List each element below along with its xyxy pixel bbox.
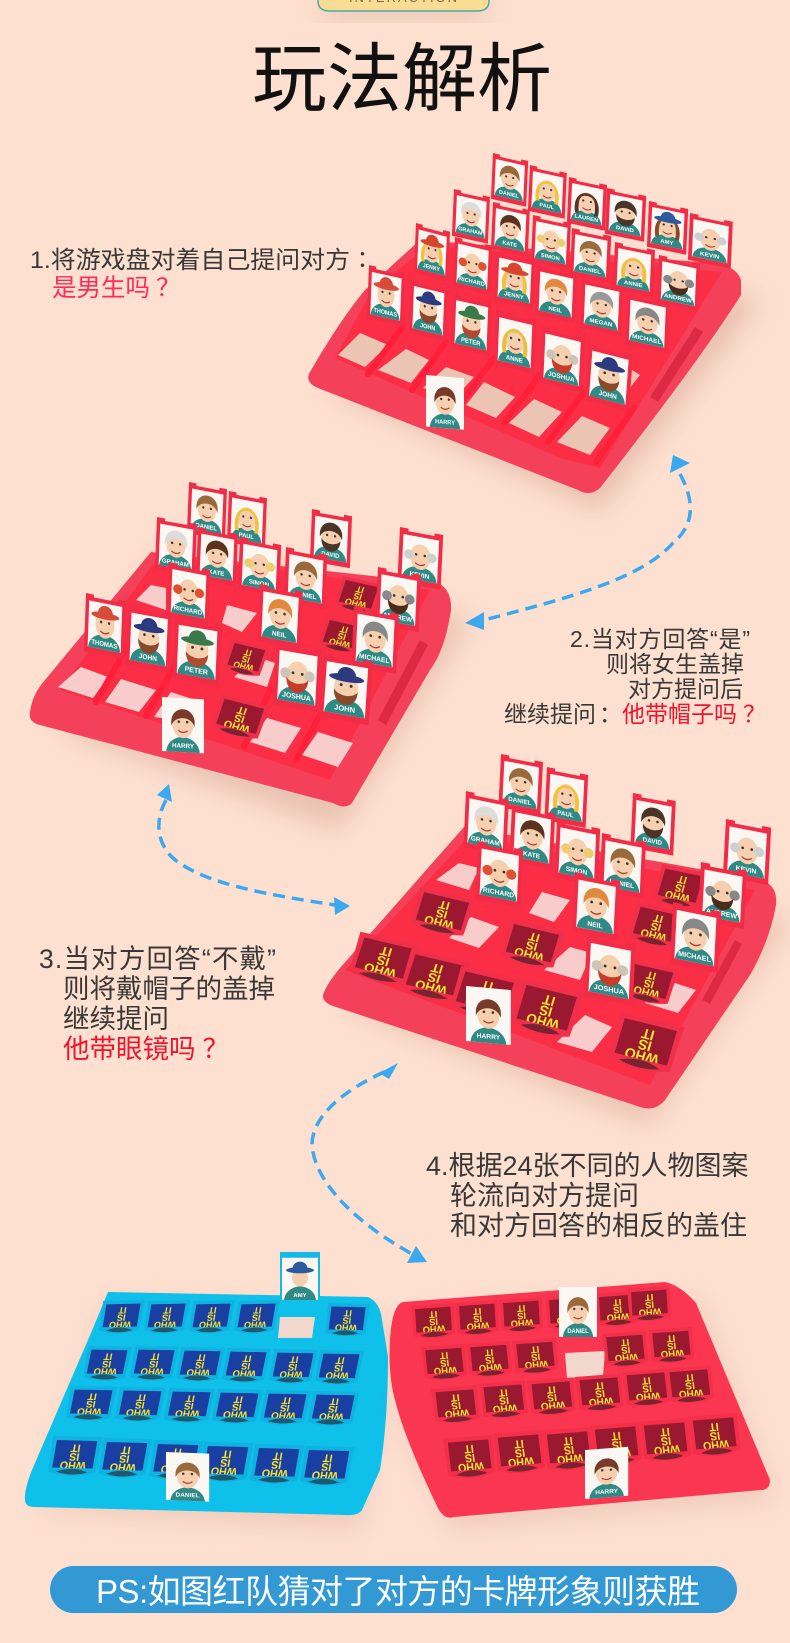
red tile row 2 (421, 1327, 695, 1381)
card: JOSHUA: JOSHUA (282, 690, 311, 703)
card: ANDREW (657, 255, 700, 312)
card: PAUL (528, 165, 567, 219)
card: AMY (647, 201, 688, 255)
covered tile (508, 979, 584, 1041)
step 2 text: 2.当对方回答“是” (570, 626, 750, 652)
card: JOSHUA (539, 326, 585, 393)
card: DANIEL: DANIEL (508, 796, 532, 807)
card: DANIEL player on blue board (166, 1452, 209, 1502)
card: DANIEL row 2 (599, 833, 646, 899)
card: AMY: AMY (660, 239, 674, 247)
card: JOHN (125, 605, 172, 673)
card: RICHARD (167, 562, 210, 625)
card: LAUREN (567, 177, 607, 231)
step 2 text: 继续提问：他带帽子吗 ？ (504, 701, 766, 727)
card: NEIL (572, 872, 620, 941)
card: ANDREW: ANDREW (383, 612, 413, 624)
arrow: board 1 to board 2 (465, 455, 690, 630)
card: JOHN: JOHN (139, 653, 157, 663)
card: ANDREW: ANDREW (664, 293, 692, 305)
board 3 with hats covered (323, 754, 790, 1125)
card: KATE (196, 527, 238, 586)
card: THOMAS (367, 265, 405, 327)
card: ANDREW (698, 862, 747, 929)
card: DANIEL row 2: DANIEL (293, 590, 317, 601)
card: KATE: KATE (523, 850, 541, 861)
covered tile (619, 959, 679, 1007)
card: NEIL: NEIL (548, 306, 563, 315)
card: DANIEL up on red board: DANIEL (567, 1329, 589, 1335)
card: GRAHAM: GRAHAM (471, 835, 500, 848)
card: JOHN (409, 279, 448, 341)
card: RICHARD: RICHARD (174, 604, 203, 617)
step 2 text: 对方提问后 (628, 676, 743, 702)
card: AMY up on blue board: AMY (293, 1293, 307, 1299)
covered tile (448, 966, 521, 1022)
card: SIMON: SIMON (249, 578, 270, 589)
step 3 text (39, 944, 276, 1064)
card: JENNY (414, 223, 450, 281)
covered tile (398, 949, 471, 1005)
card: HARRY player: HARRY (435, 419, 455, 427)
card: DANIEL row 2: DANIEL (609, 878, 634, 890)
blue tile row 1 (98, 1300, 370, 1337)
covered tile (222, 639, 270, 678)
card: THOMAS: THOMAS (91, 638, 118, 651)
card: DAVID (605, 188, 646, 242)
card: GRAHAM: GRAHAM (162, 558, 189, 569)
step 3 text: 继续提问 (63, 1004, 169, 1034)
step 4 text: 轮流向对方提问 (450, 1181, 639, 1211)
covered tile (209, 694, 270, 742)
covered tile (626, 902, 686, 950)
card: DAVID (310, 509, 352, 568)
covered tile (651, 864, 709, 911)
blue tile row 4 (46, 1436, 354, 1486)
covered tile (347, 932, 420, 988)
step 3 text: 他带眼镜吗 ？ (63, 1034, 229, 1064)
step 1 text: ： (351, 247, 374, 273)
card: DANIEL (187, 482, 227, 540)
card: THOMAS: THOMAS (373, 308, 397, 319)
card: THOMAS (84, 593, 126, 659)
card: JOHN front (319, 653, 373, 725)
card: LAUREN: LAUREN (574, 213, 598, 224)
card: JOHN: JOHN (420, 323, 435, 333)
card: DANIEL: DANIEL (196, 523, 217, 533)
card: ANDREW (375, 567, 421, 632)
card: MICHAEL: MICHAEL (359, 653, 390, 665)
card: MICHAEL (351, 606, 399, 674)
card: SIMON (554, 820, 600, 886)
card: SIMON (531, 215, 571, 270)
card: RICHARD (475, 841, 523, 908)
card: JOSHUA: JOSHUA (548, 371, 575, 384)
red board (390, 1282, 775, 1530)
card: MICHAEL (670, 902, 721, 973)
red tile row 1 (411, 1286, 672, 1339)
card: KATE: KATE (208, 569, 224, 578)
step 2 text: 则将女生盖掉 (606, 651, 744, 677)
card: ANDREW: ANDREW (706, 908, 738, 921)
card: PAUL (544, 767, 588, 828)
board 2 with girls covered (30, 482, 470, 830)
step 2 text (504, 626, 766, 727)
blue tile row 2 (81, 1346, 364, 1385)
card: GRAHAM (452, 189, 490, 244)
card: RICHARD: RICHARD (459, 276, 485, 288)
card: JOSHUA: JOSHUA (593, 982, 625, 997)
card: AMY up on blue board (280, 1252, 320, 1300)
card: PAUL (227, 491, 267, 549)
card: KATE: KATE (502, 240, 517, 249)
step 4 text: 4.根据24张不同的人物图案 (426, 1151, 749, 1181)
card: HARRY player on red board: HARRY (595, 1488, 619, 1496)
card: ANNE (494, 310, 536, 374)
card: HARRY player (426, 375, 464, 430)
arrow: board 3 to boards 4 (312, 1063, 427, 1263)
card: PETER: PETER (461, 336, 481, 348)
top badge (318, 0, 489, 18)
arrow: board 2 to board 3 (157, 784, 350, 915)
card: PAUL: PAUL (557, 809, 574, 819)
card: HARRY player (466, 986, 511, 1045)
card: KATE (509, 805, 555, 870)
board 1 with all cards up (308, 153, 760, 510)
card: JENNY: JENNY (423, 263, 440, 274)
card: JENNY row 3: JENNY (504, 291, 524, 301)
red tile row 4 (443, 1413, 742, 1480)
card: PAUL: PAUL (239, 532, 254, 541)
card: ANNE: ANNE (506, 354, 523, 365)
step 3 text: 3.当对方回答“不戴” (39, 944, 276, 974)
card: DANIEL row 2: DANIEL (579, 266, 601, 276)
card: HARRY player (162, 697, 204, 753)
card: ANNIE: ANNIE (624, 280, 643, 289)
step 4 text (426, 1151, 749, 1241)
PS banner (50, 1566, 737, 1613)
card: DAVID: DAVID (321, 551, 340, 560)
covered tile (498, 919, 565, 971)
step 4 text: 和对方回答的相反的盖住 (450, 1211, 747, 1241)
card: DANIEL: DANIEL (499, 190, 520, 200)
card: SIMON: SIMON (566, 866, 587, 877)
card: JENNY row 3 (494, 251, 535, 309)
card: KEVIN: KEVIN (700, 251, 720, 261)
card: DAVID (630, 793, 676, 856)
covered tile (408, 887, 475, 939)
covered tile (317, 616, 367, 656)
card: MEGAN (580, 278, 623, 336)
card: KEVIN: KEVIN (736, 865, 757, 876)
card: KEVIN: KEVIN (409, 570, 430, 581)
step 3 text: 则将戴帽子的盖掉 (63, 974, 275, 1004)
card: JOHN front (585, 343, 633, 411)
card: NEIL: NEIL (272, 630, 287, 640)
card: PAUL: PAUL (539, 202, 555, 211)
card: GRAHAM (155, 517, 197, 576)
card: HARRY player on red board (585, 1447, 628, 1499)
blue board (25, 1252, 395, 1530)
card: DANIEL (491, 153, 528, 207)
step 1 text (30, 247, 374, 302)
card: SIMON (238, 537, 281, 597)
card: DAVID: DAVID (642, 836, 663, 847)
red tile row 3 (431, 1365, 715, 1425)
card: NEIL (257, 584, 303, 649)
card: DANIEL up on red board (559, 1287, 597, 1337)
card: NEIL: NEIL (587, 921, 603, 930)
blue tile row 3 (64, 1386, 359, 1426)
card: PETER (451, 293, 492, 356)
card: RICHARD (453, 237, 492, 295)
card: DAVID: DAVID (616, 225, 634, 234)
card: KEVIN (723, 819, 771, 885)
card: GRAHAM (463, 791, 509, 856)
card: JOSHUA (273, 642, 322, 712)
card: KEVIN (688, 213, 733, 269)
card: DANIEL (498, 754, 543, 815)
card: SIMON: SIMON (541, 253, 560, 262)
card: RICHARD: RICHARD (483, 887, 514, 900)
card: MICHAEL: MICHAEL (678, 949, 712, 964)
card: PETER (172, 617, 222, 686)
card: HARRY player: HARRY (172, 742, 195, 751)
covered tile (606, 1012, 684, 1077)
card: ANNIE (613, 242, 655, 297)
card: DANIEL player on blue board: DANIEL (176, 1492, 200, 1499)
card: PETER: PETER (184, 665, 208, 677)
card: MICHAEL (625, 293, 670, 354)
title: 玩法解析 (252, 37, 552, 121)
card: JOHN front: JOHN (334, 702, 355, 715)
card: KEVIN (397, 527, 443, 590)
card: KATE (491, 202, 530, 257)
card: JOHN front: JOHN (598, 390, 617, 401)
covered tile (333, 576, 383, 616)
step 1 text: 是男生吗？ (52, 274, 180, 302)
card: NEIL (535, 265, 577, 323)
card: MEGAN: MEGAN (589, 318, 613, 329)
card: DANIEL row 2 (284, 547, 327, 610)
card: HARRY player: HARRY (477, 1033, 501, 1042)
card: DANIEL row 2 (570, 228, 611, 283)
card: MICHAEL: MICHAEL (632, 333, 662, 346)
PS banner: PS:如图红队猜对了对方的卡牌形象则获胜 (96, 1573, 700, 1610)
card: JOSHUA (584, 935, 636, 1006)
card: GRAHAM: GRAHAM (458, 226, 483, 237)
step 1 text: 1.将游戏盘对着自己提问对方 (30, 247, 350, 274)
